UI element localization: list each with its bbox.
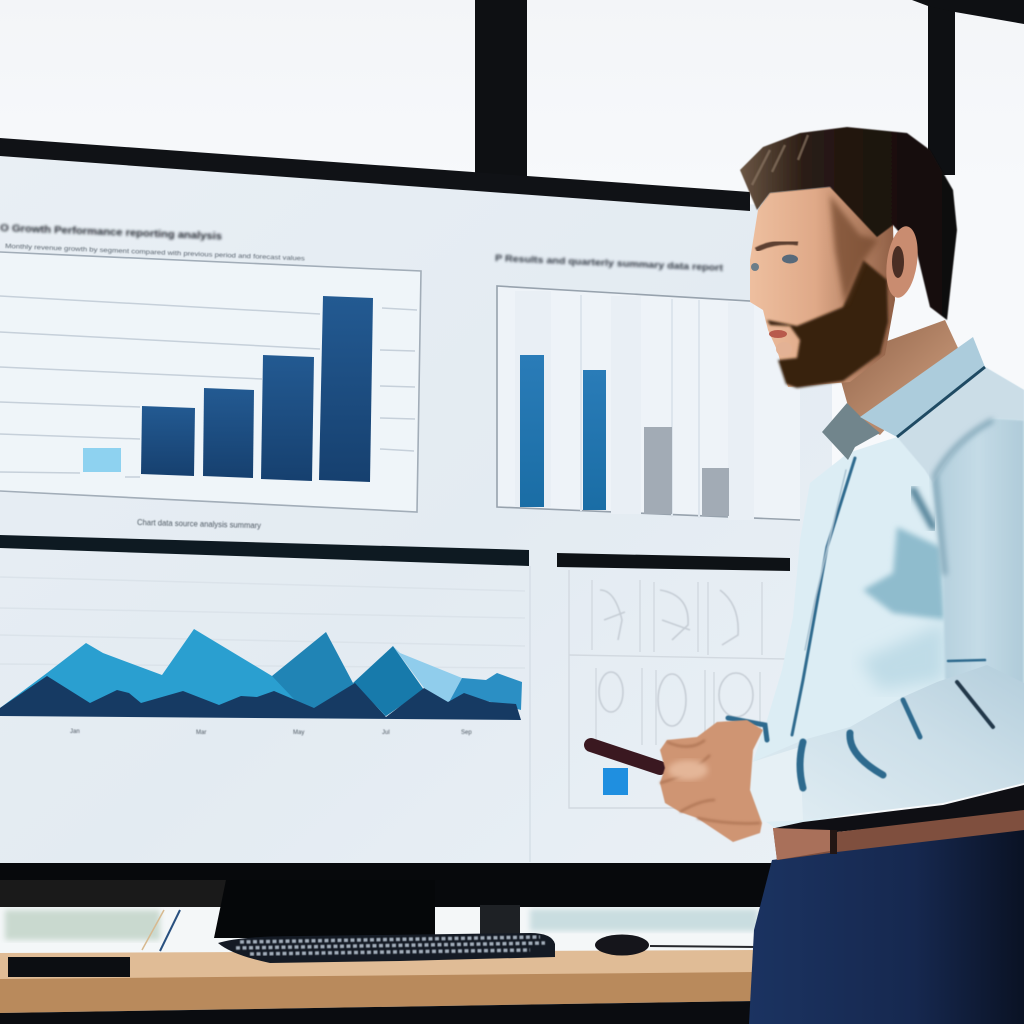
hair highlights [752,135,808,185]
desk [0,950,755,1024]
blue area series [0,629,353,716]
hair [740,127,957,320]
blue square [603,768,628,795]
axis labels: Jan [70,729,80,735]
face [750,187,895,387]
monitor stand [214,880,520,938]
caption: Chart data source analysis summary [137,518,261,530]
keyboard [218,933,555,963]
axis labels: May [293,730,304,736]
sleeve fold shadow [935,420,993,575]
monitor bottom bezel [0,863,774,907]
trousers [749,825,1024,1024]
beard [767,260,888,388]
window frames [475,0,1024,180]
chart heading: P Results and quarterly summary data report [495,253,724,274]
axis labels [70,729,472,736]
mouse [595,934,757,956]
neck [835,320,958,435]
forearm sleeve [750,665,1024,822]
collar [822,337,985,460]
shirt upper sleeve [933,418,1024,690]
thumbnail sketches [599,590,753,726]
hands [660,720,763,842]
axis labels: Mar [196,730,206,736]
shirt torso [750,367,1024,828]
sleeve folds and piping [728,458,993,788]
phone on desk [8,957,130,977]
ear [882,224,922,300]
panel: bar chart right [495,253,800,520]
bars [83,296,373,482]
shirt shadow [860,527,945,690]
axis labels: Sep [461,730,472,736]
panel: area chart [0,535,530,862]
temple shadow [830,195,878,305]
bars [520,355,729,516]
panel: bar chart left [0,223,421,530]
panel: bar chart left: Monthly revenue growth by segment compared with previous period and forecast values [5,244,305,263]
chart heading: O Growth Performance reporting analysis [0,223,223,243]
person [728,127,1024,828]
shoulder [897,367,1024,483]
monitor top bezel [0,138,750,211]
lips [769,330,792,356]
panel: thumbnail grid [557,553,790,808]
brow and eyes [751,242,798,271]
background under monitor [0,906,760,954]
dark area series [0,676,521,720]
belt [773,785,1024,860]
shirt cuff [750,747,803,822]
axis labels: Jul [382,730,390,736]
light area wedge [393,646,462,704]
monitor screen [0,138,832,870]
phone in hand [591,745,660,768]
